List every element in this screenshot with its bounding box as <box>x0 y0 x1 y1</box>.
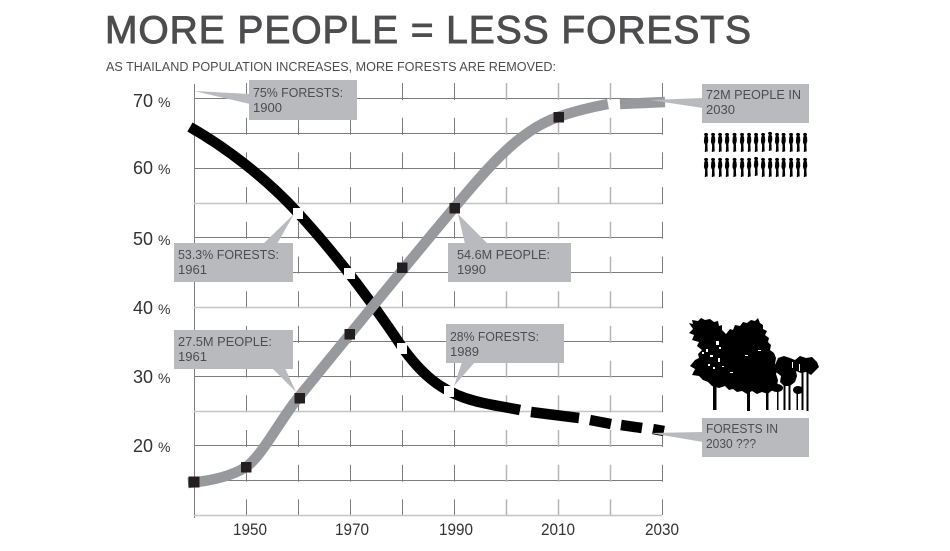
callout: 75% forests 1900 <box>194 80 357 120</box>
forest markers <box>293 208 454 397</box>
x axis labels: 1950 <box>233 521 267 539</box>
people markers <box>188 112 564 488</box>
icon: trees silhouette <box>689 318 819 411</box>
y axis labels <box>133 91 170 456</box>
callout: 75% forests 1900: 75% FORESTS: <box>253 86 343 100</box>
callout: forests in 2030: 2030 ??? <box>706 437 756 451</box>
callout: 53.3% forests 1961 <box>174 214 294 282</box>
subtitle: AS THAILAND POPULATION INCREASES, MORE FORESTS ARE REMOVED: <box>106 60 556 74</box>
y axis labels: 70 % <box>133 91 170 111</box>
callout: 27.5M people 1961: 1961 <box>178 350 207 364</box>
callout: forests in 2030 <box>650 418 809 457</box>
chart grid <box>194 83 662 518</box>
icon: people silhouettes <box>704 132 807 177</box>
callout: forests in 2030: FORESTS IN <box>706 422 778 436</box>
y axis labels: 40 % <box>133 298 170 318</box>
y axis labels: 20 % <box>133 436 170 456</box>
x axis labels: 1970 <box>335 521 369 539</box>
callout: 75% forests 1900: 1900 <box>253 101 282 115</box>
callout: 27.5M people 1961: 27.5M PEOPLE: <box>178 335 272 349</box>
callout: 53.3% forests 1961: 53.3% FORESTS: <box>178 248 279 262</box>
callout: 27.5M people 1961 <box>174 330 296 392</box>
callout: 72M people 2030: 72M PEOPLE IN <box>706 88 801 102</box>
callout: 72M people 2030: 2030 <box>706 103 735 117</box>
title: MORE PEOPLE = LESS FORESTS <box>105 9 751 52</box>
callout: 54.6M people 1990: 54.6M PEOPLE: <box>457 248 550 262</box>
callout: 28% forests 1989 <box>446 324 564 386</box>
callout: 28% forests 1989: 28% FORESTS: <box>450 330 539 344</box>
forests line <box>190 127 664 431</box>
callout: 28% forests 1989: 1989 <box>450 345 479 359</box>
people line <box>188 102 665 483</box>
callout: 54.6M people 1990 <box>448 214 571 282</box>
x axis labels: 2030 <box>645 521 679 539</box>
callout: 72M people 2030 <box>650 84 809 123</box>
x axis labels <box>233 521 679 539</box>
y axis labels: 30 % <box>133 367 170 387</box>
y axis labels: 50 % <box>133 229 170 249</box>
y axis labels: 60 % <box>133 158 170 178</box>
callout: 53.3% forests 1961: 1961 <box>178 263 207 277</box>
callout: 54.6M people 1990: 1990 <box>457 263 486 277</box>
x axis labels: 1990 <box>439 521 473 539</box>
x axis labels: 2010 <box>541 521 575 539</box>
